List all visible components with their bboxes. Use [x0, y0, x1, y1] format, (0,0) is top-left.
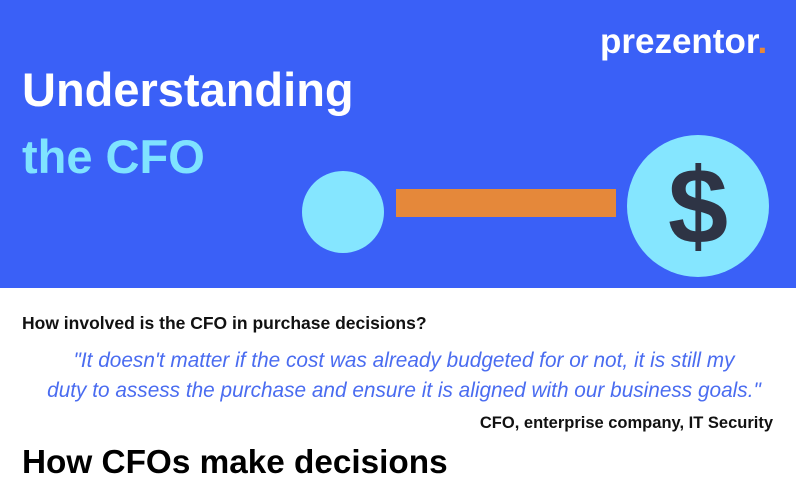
title: Understanding: [22, 63, 354, 116]
quote: duty to assess the purchase and ensure it is aligned with our business goals.": [47, 379, 761, 402]
small circle: [302, 171, 384, 253]
subtitle: the CFO: [22, 130, 205, 183]
logo: prezentor.: [600, 22, 767, 61]
quote: "It doesn't matter if the cost was already budgeted for or not, it is still my: [74, 349, 734, 372]
attribution: CFO, enterprise company, IT Security: [480, 414, 773, 432]
orange connector bar: [396, 189, 616, 217]
question heading: How involved is the CFO in purchase decisions?: [22, 313, 427, 333]
icon: dollar circle: $: [668, 145, 728, 266]
header banner: [0, 0, 796, 288]
icon: dollar circle: [627, 135, 769, 277]
section heading: How CFOs make decisions: [22, 444, 448, 481]
quote: [47, 349, 762, 402]
